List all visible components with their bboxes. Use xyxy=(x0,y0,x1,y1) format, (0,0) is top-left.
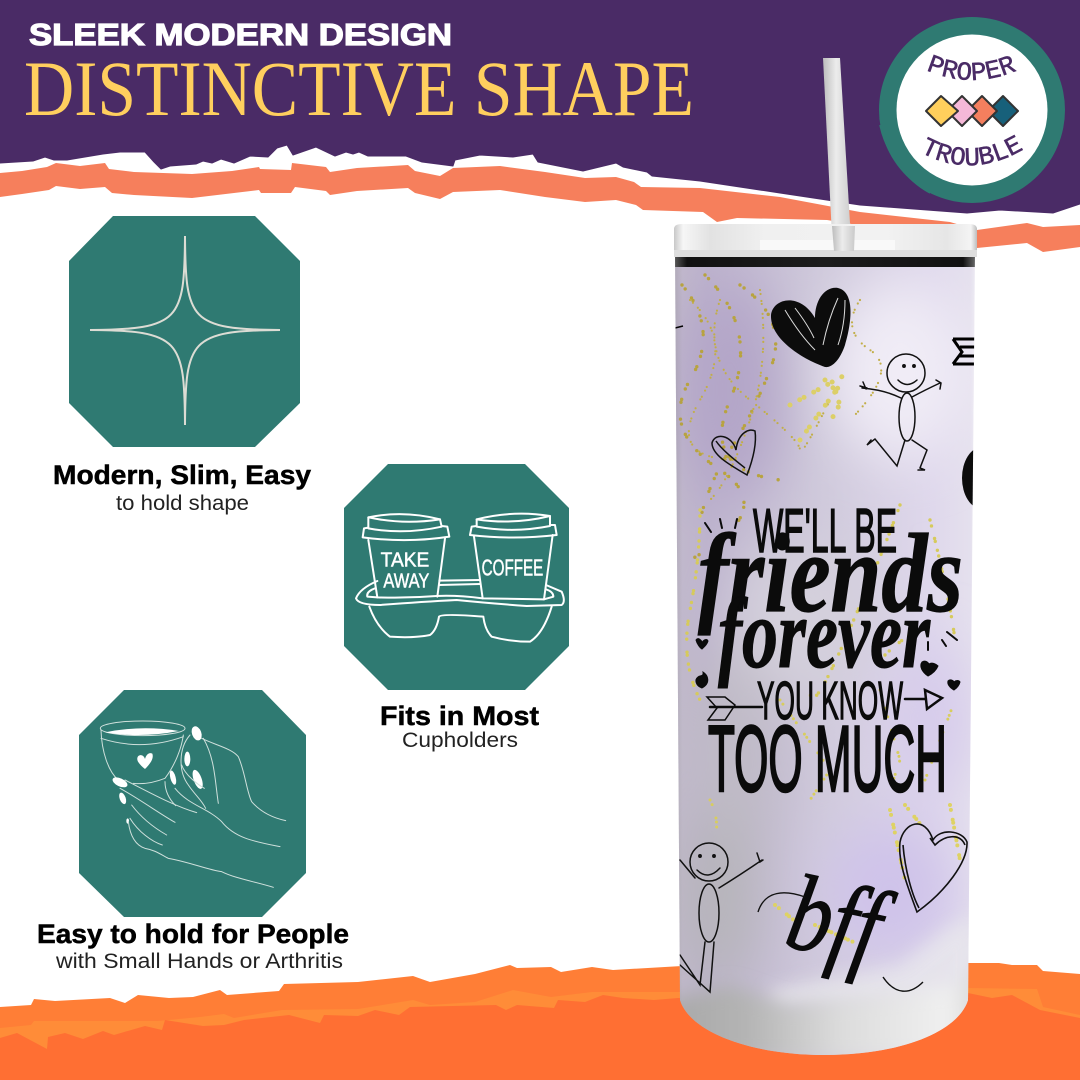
heading: distinctive shape: DISTINCTIVE SHAPE xyxy=(24,45,694,132)
icon: take away coffee cups: TAKE xyxy=(381,549,429,572)
icon: take away coffee cups xyxy=(344,464,569,690)
torn orange stripe xyxy=(0,163,1080,252)
tumbler quote lettering: YOU KNOW xyxy=(757,671,903,731)
icon: take away coffee cups: AWAY xyxy=(383,569,430,592)
panel: cupholders xyxy=(344,464,569,752)
label: modern slim easy: Modern, Slim, Easy xyxy=(53,460,311,490)
quote decorations: rays hearts arrows xyxy=(696,519,960,720)
caption: small hands or arthritis: with Small Hands or Arthritis xyxy=(55,950,343,973)
gold speckles xyxy=(680,275,960,945)
bottom orange torn band xyxy=(0,963,1080,1080)
logo: proper trouble: PROPER xyxy=(928,54,1017,80)
tumbler quote lettering: WE'LL BE xyxy=(753,497,897,566)
doodle: outline large heart xyxy=(900,824,967,912)
panel: modern slim easy xyxy=(53,216,311,515)
tumbler quote lettering: friends xyxy=(698,512,963,636)
tumbler quote lettering: forever xyxy=(718,578,931,689)
bff script lettering: bff xyxy=(778,853,903,990)
doodle: arrow fletching xyxy=(953,339,975,364)
tumbler quote lettering xyxy=(698,497,963,811)
icon: hands holding cup xyxy=(79,690,306,917)
label: fits in most: Fits in Most xyxy=(380,701,539,731)
panel: easy to hold xyxy=(37,690,349,973)
doodle: stick figure running xyxy=(860,354,941,470)
caption: to hold shape: to hold shape xyxy=(116,492,249,515)
pale patch near base xyxy=(770,926,968,1011)
black band under lid xyxy=(675,257,975,267)
doodle: stick figure jumping xyxy=(680,843,763,992)
bff flourish xyxy=(758,893,923,991)
small tick xyxy=(675,326,683,328)
tumbler product xyxy=(670,58,1002,1060)
straw xyxy=(823,58,852,256)
doodle: partial black heart xyxy=(962,450,974,506)
doodle: outline small heart xyxy=(712,430,755,475)
tumbler lid xyxy=(674,224,977,257)
label: easy to hold for people: Easy to hold for People xyxy=(37,919,349,949)
panel: purple header band xyxy=(0,0,1080,213)
caption: cupholders: Cupholders xyxy=(402,729,518,752)
tumbler body xyxy=(675,257,975,1055)
logo: proper trouble xyxy=(879,17,1065,203)
icon: take away coffee cups: COFFEE xyxy=(482,555,543,581)
logo: proper trouble: TROUBLE xyxy=(926,134,1023,166)
icon: four point star xyxy=(69,216,300,447)
heading: sleek modern design: SLEEK MODERN DESIGN xyxy=(29,17,452,52)
doodle: filled heart xyxy=(771,288,851,367)
